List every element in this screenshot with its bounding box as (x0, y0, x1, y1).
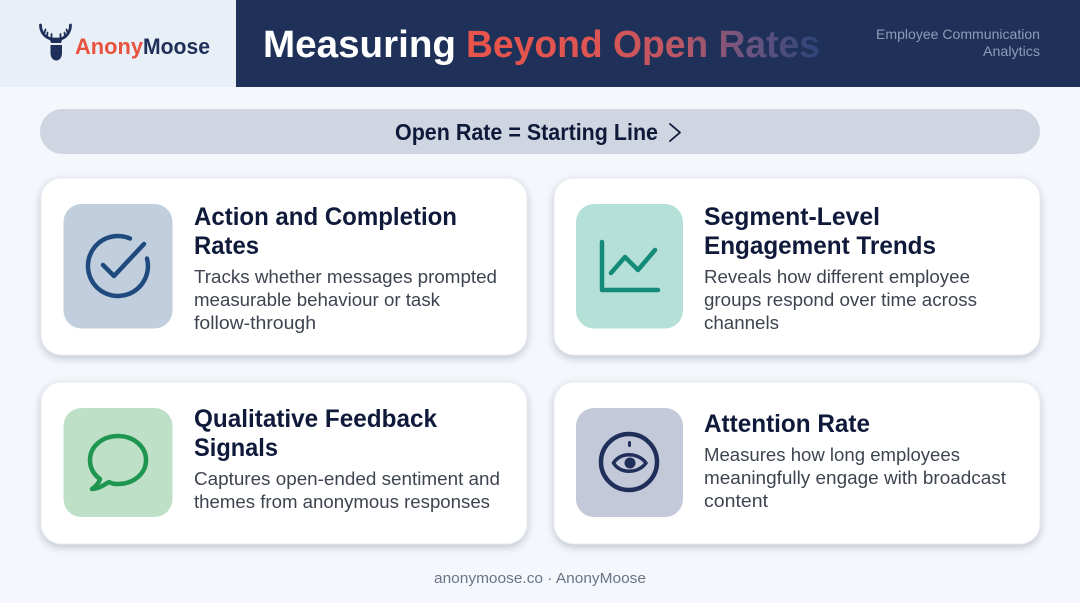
description (704, 445, 1006, 511)
heading: Qualitative Feedback (194, 405, 437, 433)
icon: speech bubble (64, 408, 172, 517)
footer: anonymoose.co · AnonyMoose (434, 570, 646, 587)
logo wordmark: Anony (75, 34, 144, 59)
description (704, 267, 977, 333)
banner: open rate starting line: Open Rate = Starting Line (395, 119, 658, 145)
heading: Rates (194, 232, 259, 260)
heading: Action and Completion (194, 203, 457, 231)
heading: Attention Rate (704, 410, 870, 438)
panel: action and completion rates (41, 178, 527, 355)
header band (0, 0, 1080, 87)
description: measurable behaviour or task (194, 290, 441, 310)
description: Tracks whether messages prompted (194, 267, 497, 287)
logo wordmark: Moose (143, 34, 210, 59)
heading (194, 203, 457, 260)
description: meaningfully engage with broadcast (704, 468, 1006, 488)
subtitle (876, 26, 1040, 59)
description: themes from anonymous responses (194, 492, 490, 512)
description: content (704, 491, 768, 511)
title: Measuring (263, 24, 456, 66)
panel: segment-level engagement trends (554, 178, 1040, 355)
heading: Signals (194, 434, 278, 462)
logo panel (0, 0, 236, 87)
icon: check circle (64, 204, 172, 328)
logo wordmark (75, 34, 210, 59)
description (194, 267, 497, 333)
title: Beyond Open Rates (466, 24, 820, 66)
title panel (236, 0, 1080, 87)
description: Captures open-ended sentiment and (194, 469, 500, 489)
heading (194, 405, 437, 462)
icon: eye (576, 408, 683, 517)
panel: qualitative feedback signals (41, 382, 527, 544)
panel: attention rate (554, 382, 1040, 544)
description: Measures how long employees (704, 445, 960, 465)
heading: Engagement Trends (704, 232, 936, 260)
description: follow-through (194, 313, 316, 333)
description: channels (704, 313, 779, 333)
heading: Segment-Level (704, 203, 880, 231)
icon: chevron (670, 124, 680, 141)
icon: moose logo (40, 25, 70, 60)
description: groups respond over time across (704, 290, 977, 310)
banner: open rate starting line (40, 109, 1040, 154)
heading (704, 203, 936, 260)
icon: line chart (576, 204, 683, 328)
subtitle: Employee Communication (876, 26, 1040, 42)
description (194, 469, 500, 512)
title (263, 24, 820, 66)
subtitle: Analytics (983, 43, 1040, 59)
description: Reveals how different employee (704, 267, 970, 287)
